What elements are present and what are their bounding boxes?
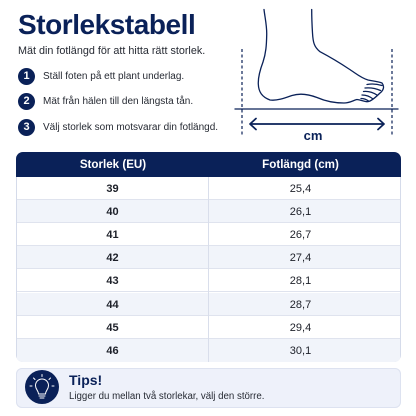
row 44: [17, 292, 400, 316]
row 41: 26,7: [290, 229, 311, 241]
row 40: 26,1: [290, 206, 311, 218]
arrow: length: [250, 118, 384, 130]
table header: Storlek (EU): [80, 158, 146, 171]
row 43: 28,1: [290, 275, 311, 287]
step 2: 2: [23, 95, 30, 107]
icon: foot outline: [258, 10, 384, 103]
subtitle: Mät din fotlängd för att hitta rätt storlek.: [18, 45, 205, 57]
row 43: 43: [106, 275, 119, 287]
row 42: [17, 246, 400, 269]
tips heading: Tips!: [69, 372, 102, 388]
row 45: [17, 316, 400, 339]
rows: [17, 183, 400, 362]
row 46: [17, 339, 400, 362]
step 3: 3: [23, 121, 30, 133]
step 1: Ställ foten på ett plant underlag.: [43, 71, 184, 82]
table header: Fotlängd (cm): [262, 158, 339, 171]
row 39: 39: [106, 183, 119, 195]
ground line: [235, 108, 398, 110]
step 2: [18, 93, 193, 110]
step 3: Välj storlek som motsvarar din fotlängd.: [43, 122, 218, 133]
row 41: 41: [106, 229, 119, 241]
row 39: [17, 177, 400, 200]
unit label: cm: [304, 128, 322, 143]
row 41: [17, 223, 400, 246]
row 45: 45: [106, 322, 119, 334]
foot measurement diagram: [234, 8, 399, 143]
size table: [16, 152, 401, 362]
row 44: 28,7: [290, 298, 311, 310]
step 1: 1: [23, 70, 30, 82]
row 40: [17, 200, 400, 223]
step 1: [18, 68, 184, 85]
tips text: Ligger du mellan två storlekar, välj den större.: [69, 390, 264, 402]
title: Storlekstabell: [18, 9, 195, 40]
step 2: Mät från hälen till den längsta tån.: [43, 96, 193, 107]
table header: [16, 152, 401, 177]
dashed guides: [242, 49, 392, 137]
row 46: 46: [106, 345, 119, 357]
row 39: 25,4: [290, 183, 311, 195]
row 46: 30,1: [290, 345, 311, 357]
row 40: 40: [106, 206, 119, 218]
row 43: [17, 269, 400, 292]
icon: light bulb: [25, 370, 59, 404]
row 42: 27,4: [290, 252, 311, 264]
step 3: [18, 119, 218, 136]
row 42: 42: [106, 252, 119, 264]
tips callout: [16, 368, 401, 408]
row 44: 44: [106, 298, 119, 310]
steps list: [18, 68, 218, 136]
row 45: 29,4: [290, 322, 311, 334]
